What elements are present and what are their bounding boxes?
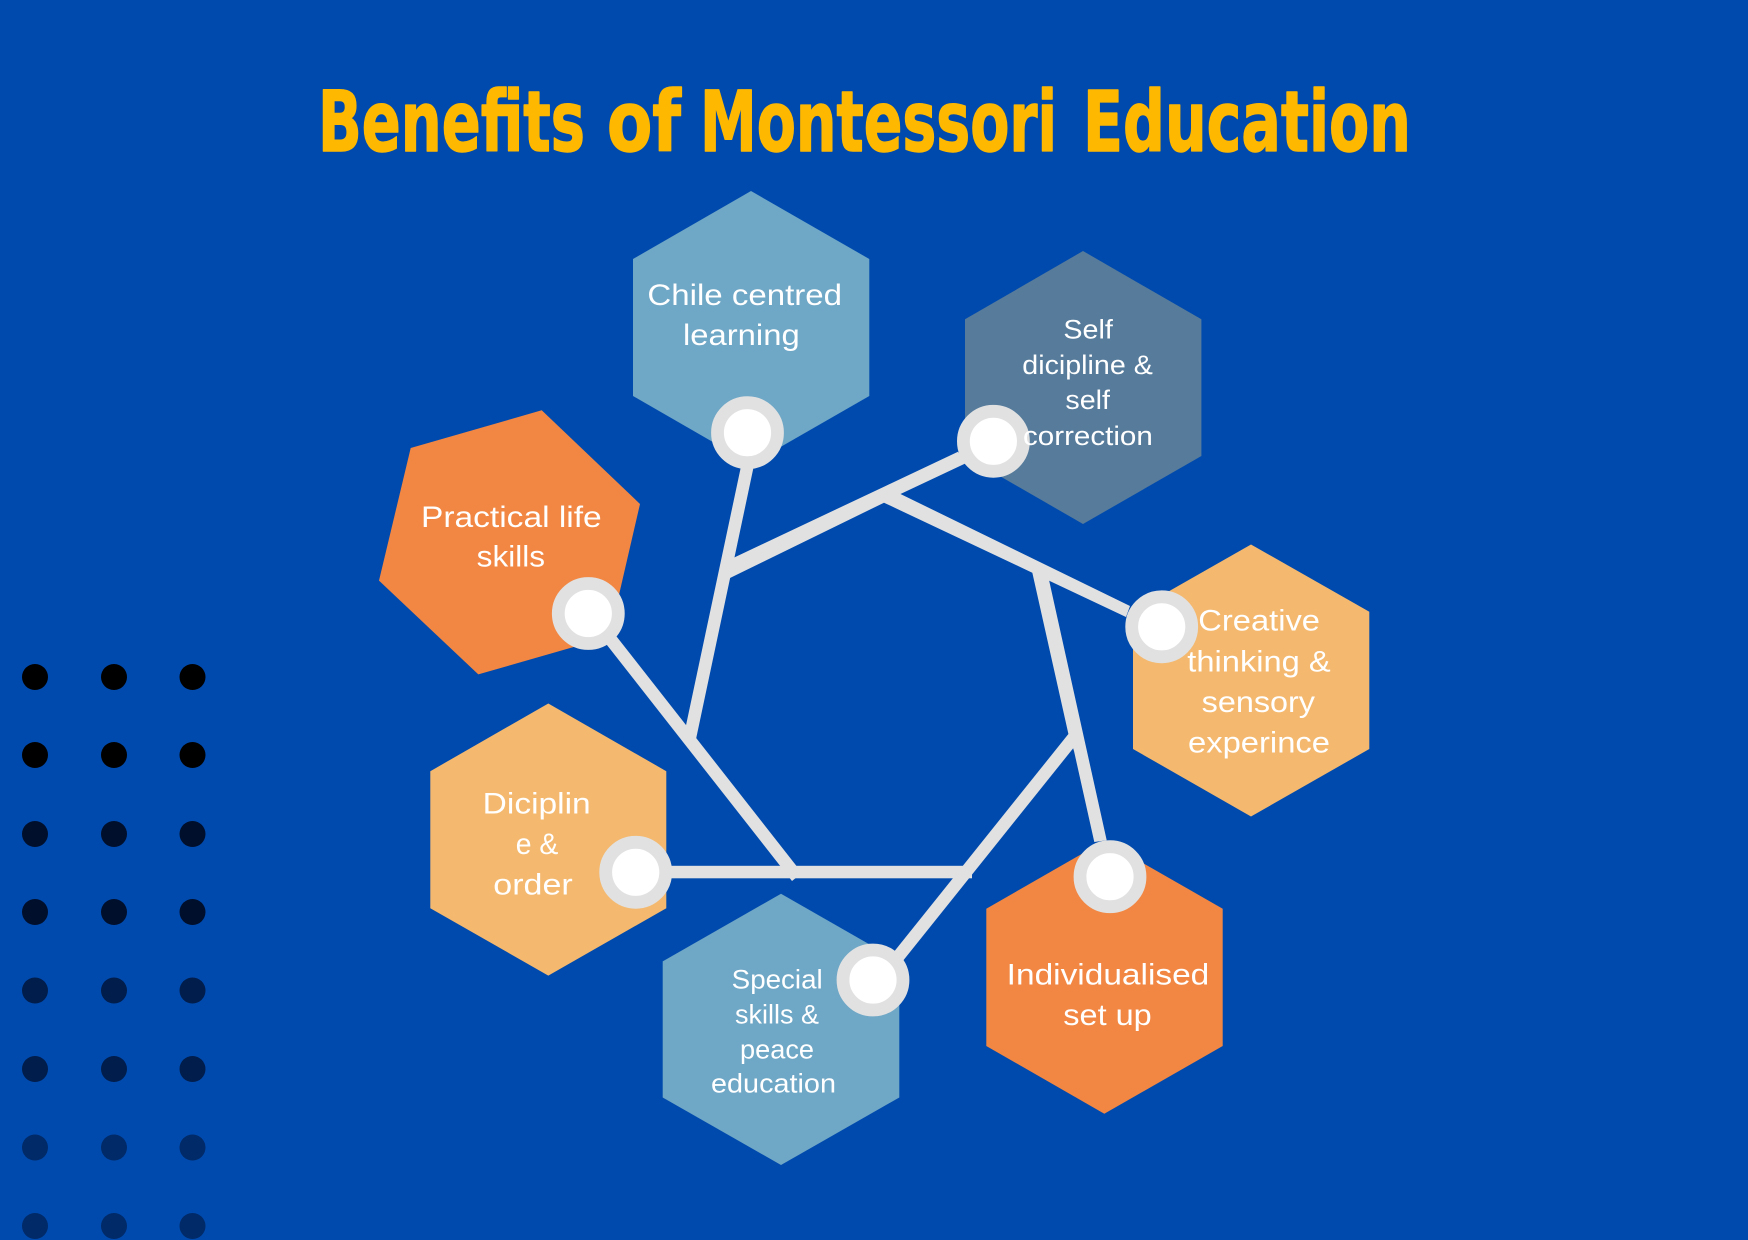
label: practical life skills: skills <box>477 540 545 574</box>
hexagon: child centred learning <box>633 191 869 464</box>
label: discipline and order: order <box>493 868 573 902</box>
label: special skills and peace education: skills & <box>735 1000 819 1030</box>
node: discipline and order <box>606 842 666 902</box>
label: discipline and order: Diciplin <box>483 787 591 820</box>
label: practical life skills <box>421 501 602 574</box>
label: child centred learning <box>647 279 842 352</box>
title: of <box>607 73 682 171</box>
label: self discipline and self correction: self <box>1065 385 1111 415</box>
title <box>318 73 1411 171</box>
label: child centred learning: learning <box>683 319 800 352</box>
label: special skills and peace education <box>711 964 836 1099</box>
label: discipline and order <box>483 787 591 902</box>
node: individualised set up <box>1080 847 1140 907</box>
label: special skills and peace education: education <box>711 1069 836 1099</box>
node: special skills <box>843 950 903 1010</box>
label: self discipline and self correction: correction <box>1023 421 1153 451</box>
label: creative thinking and sensory experience: Creative <box>1198 605 1320 638</box>
label: individualised set up: Individualised <box>1007 959 1209 992</box>
label: creative thinking and sensory experience: thinking & <box>1187 645 1331 678</box>
hexagon: self discipline and self correction <box>965 251 1201 524</box>
label: discipline and order: e & <box>516 828 558 861</box>
node: child centred learning <box>718 403 778 463</box>
label: practical life skills: Practical life <box>421 501 602 534</box>
label: self discipline and self correction <box>1022 314 1153 451</box>
dot pattern <box>22 664 206 1239</box>
label: creative thinking and sensory experience: sensory <box>1202 686 1315 719</box>
title: Benefits <box>318 73 585 171</box>
title: Education <box>1083 73 1411 171</box>
label: special skills and peace education: Special <box>732 964 823 994</box>
hexagon: individualised set up <box>986 841 1223 1114</box>
node: practical life skills <box>558 584 618 644</box>
node: creative thinking <box>1132 597 1192 657</box>
label: creative thinking and sensory experience <box>1187 605 1331 760</box>
hexagon: special skills and peace education <box>663 894 899 1165</box>
label: individualised set up: set up <box>1063 999 1152 1032</box>
label: special skills and peace education: peace <box>740 1034 814 1064</box>
label: self discipline and self correction: dicipline & <box>1022 350 1153 380</box>
label: individualised set up <box>1007 959 1209 1032</box>
hexagon: creative thinking and sensory experience <box>1133 544 1369 816</box>
label: child centred learning: Chile centred <box>647 279 842 312</box>
hexagon: practical life skills <box>379 410 640 674</box>
hexagon: discipline and order <box>430 704 666 976</box>
title: Montessori <box>700 73 1057 171</box>
connector lines <box>585 448 1130 984</box>
label: creative thinking and sensory experience: experince <box>1188 726 1330 760</box>
node: self discipline <box>963 411 1023 471</box>
label: self discipline and self correction: Self <box>1063 314 1113 344</box>
